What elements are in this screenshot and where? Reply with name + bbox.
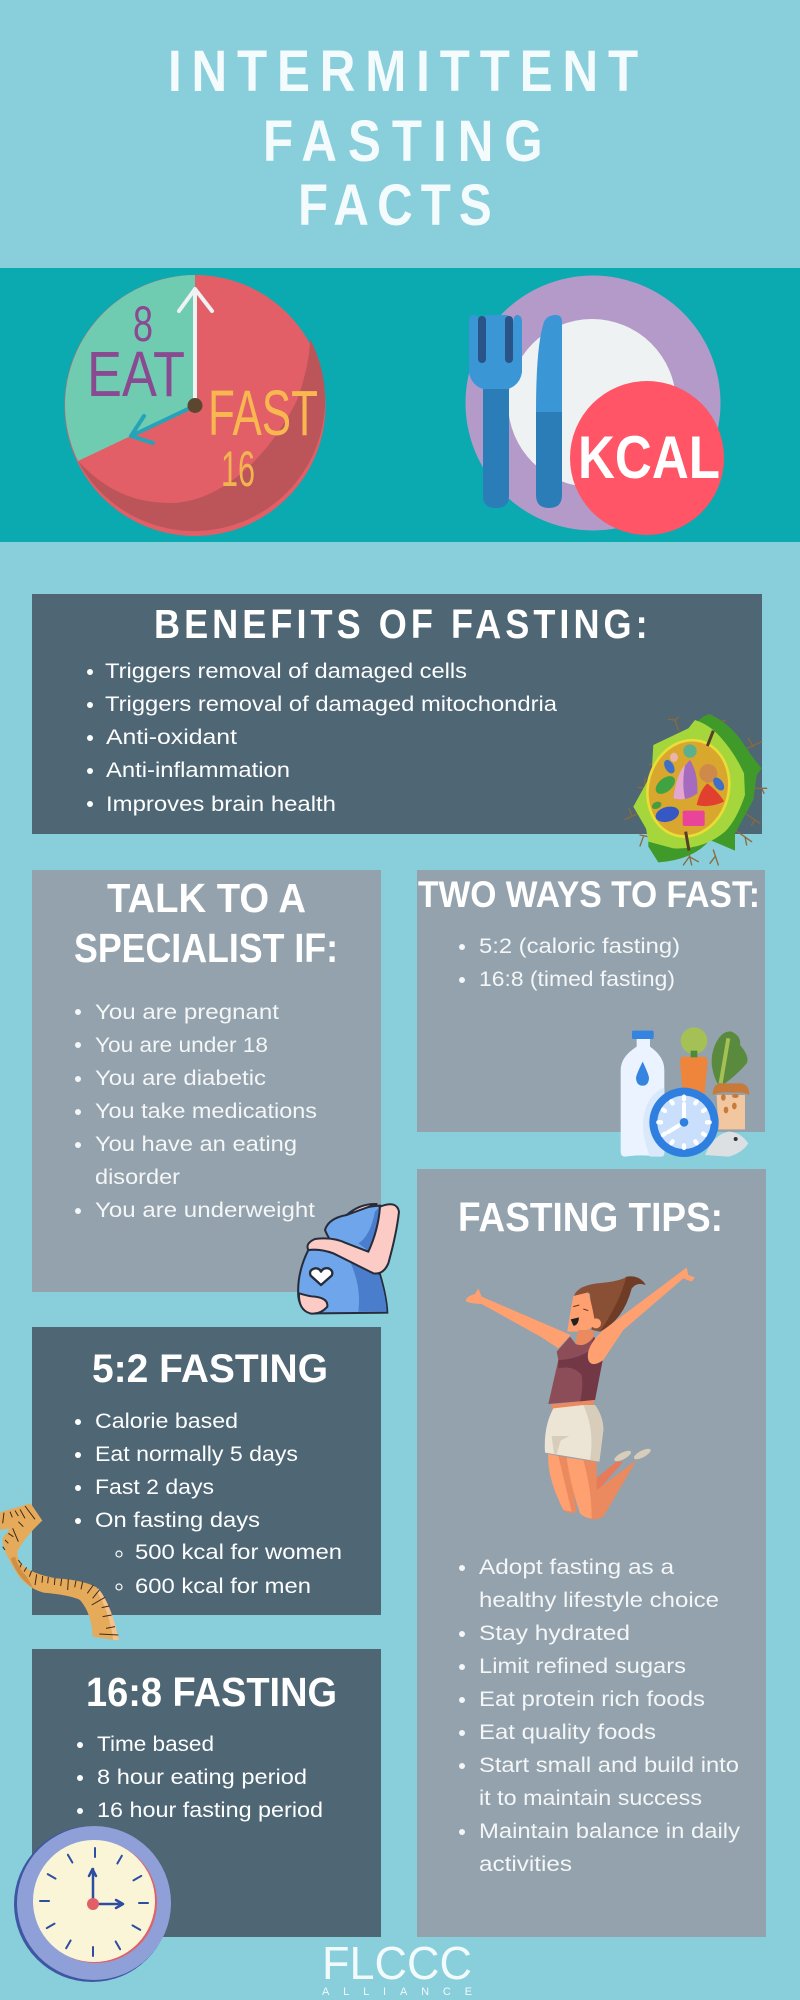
icon: jumping woman (466, 1267, 695, 1519)
panel: talk to a specialist (32, 870, 381, 1292)
logo: FLCCC Alliance: FLCCC (322, 1937, 472, 1989)
logo: FLCCC Alliance: ALLIANCE (322, 1986, 472, 1998)
panel: fasting tips (417, 1169, 766, 1937)
panel: benefits of fasting (32, 594, 762, 834)
list: two ways: 16:8 (timed fasting) (479, 968, 675, 991)
list: specialist reasons: You have an eating (95, 1133, 297, 1156)
list: 5:2 details: On fasting days (95, 1509, 260, 1532)
title: FACTS (298, 173, 492, 238)
list: fasting tips: Start small and build into (479, 1754, 739, 1777)
list: specialist reasons: You are under 18 (95, 1034, 268, 1057)
list: fasting tips: Stay hydrated (479, 1622, 630, 1645)
title (168, 39, 638, 238)
list: benefits: Triggers removal of damaged cells (105, 660, 467, 683)
list: 16:8 details: 8 hour eating period (97, 1766, 307, 1789)
icon: food and water with clock (621, 1027, 749, 1157)
icon: pregnant woman (298, 1204, 399, 1314)
list: benefits: Triggers removal of damaged mitochondria (105, 693, 557, 716)
list: 5:2 details: 500 kcal for women (135, 1541, 342, 1564)
list: specialist reasons: You are underweight (95, 1199, 315, 1222)
icon: 16:8 fasting clock (64, 275, 326, 536)
list: 16:8 details: Time based (97, 1733, 214, 1756)
panel: two ways to fast (417, 870, 765, 1132)
list: fasting tips: Eat protein rich foods (479, 1688, 705, 1711)
list: fasting tips: activities (479, 1853, 572, 1876)
list: specialist reasons: disorder (95, 1166, 180, 1189)
list: 5:2 details: Calorie based (95, 1410, 238, 1433)
list: benefits (87, 660, 557, 816)
icon: wall clock (14, 1826, 171, 1982)
list: 5:2 details: Fast 2 days (95, 1476, 214, 1499)
list: 5:2 details (75, 1410, 342, 1598)
icon: 16:8 fasting clock: 8 (133, 296, 153, 352)
list: two ways (459, 935, 680, 991)
list: fasting tips: Maintain balance in daily (479, 1820, 741, 1843)
list: benefits: Anti-inflammation (106, 759, 290, 782)
title: INTERMITTENT (168, 39, 638, 104)
panel: 5:2 fasting (32, 1327, 381, 1615)
icon: 16:8 fasting clock: EAT (87, 338, 185, 410)
list: 16:8 details (77, 1733, 323, 1822)
teal banner (0, 268, 800, 542)
panel: 16:8 fasting (32, 1649, 381, 1937)
heading: talk to a specialist (74, 875, 338, 971)
list: 5:2 details: Eat normally 5 days (95, 1443, 298, 1466)
list: 16:8 details: 16 hour fasting period (97, 1799, 323, 1822)
list: fasting tips: Limit refined sugars (479, 1655, 686, 1678)
title: FASTING (263, 109, 543, 174)
list: specialist reasons: You take medications (95, 1100, 317, 1123)
list: benefits: Improves brain health (106, 793, 336, 816)
list: 5:2 details: 600 kcal for men (135, 1575, 311, 1598)
heading: two ways to fast: TWO WAYS TO FAST: (418, 874, 760, 915)
icon: 16:8 fasting clock: 16 (221, 441, 255, 497)
list: fasting tips: Eat quality foods (479, 1721, 656, 1744)
heading: talk to a specialist: TALK TO A (107, 875, 306, 921)
list: specialist reasons: You are pregnant (95, 1001, 279, 1024)
heading: fasting tips: FASTING TIPS: (458, 1194, 723, 1240)
list: two ways: 5:2 (caloric fasting) (479, 935, 680, 958)
icon: tape measure (0, 1503, 119, 1641)
heading: benefits: BENEFITS OF FASTING: (154, 602, 648, 648)
list: specialist reasons: You are diabetic (95, 1067, 266, 1090)
list: fasting tips: healthy lifestyle choice (479, 1589, 719, 1612)
icon: plate with cutlery and KCAL badge: KCAL (578, 424, 720, 491)
heading: 16:8 fasting: 16:8 FASTING (86, 1669, 337, 1715)
heading: talk to a specialist: SPECIALIST IF: (74, 925, 338, 971)
icon: plate with cutlery and KCAL badge (466, 276, 724, 535)
icon: plant cell (625, 714, 767, 865)
list: benefits: Anti-oxidant (106, 726, 237, 749)
heading: 5:2 fasting: 5:2 FASTING (92, 1347, 328, 1391)
list: fasting tips: it to maintain success (479, 1787, 702, 1810)
list: fasting tips: Adopt fasting as a (479, 1556, 674, 1579)
icon: 16:8 fasting clock: FAST (208, 377, 318, 449)
list: fasting tips (459, 1556, 741, 1876)
list: specialist reasons (75, 1001, 317, 1222)
